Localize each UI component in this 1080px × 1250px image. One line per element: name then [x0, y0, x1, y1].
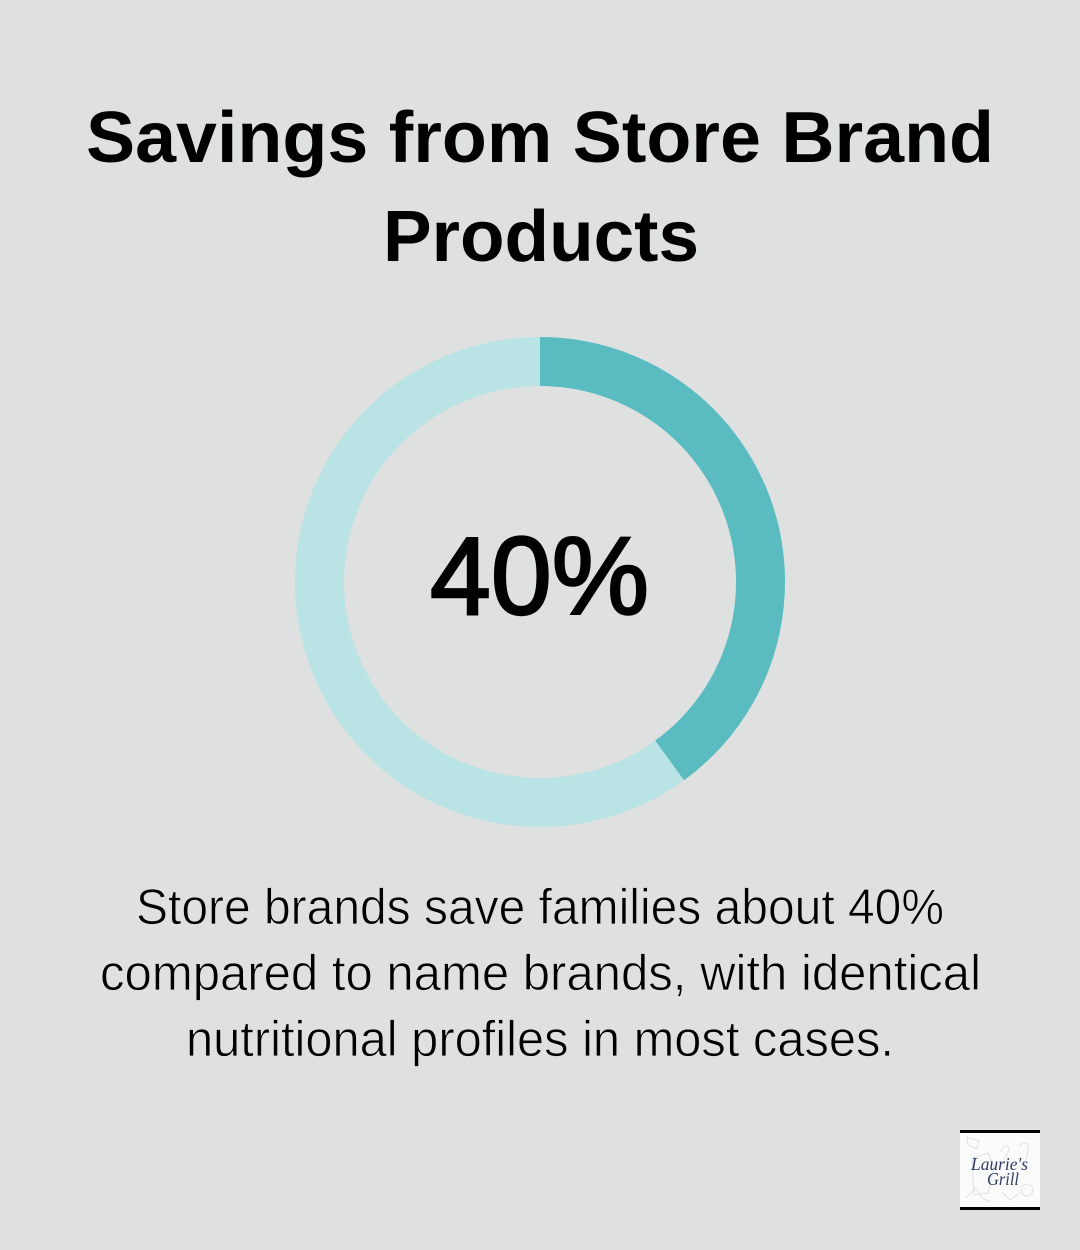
logo top bar — [960, 1130, 1040, 1133]
logo text: Grill — [987, 1169, 1019, 1189]
logo sketch decoration — [966, 1137, 1033, 1202]
logo text — [970, 1154, 1028, 1189]
logo bottom bar — [960, 1207, 1040, 1210]
description text: nutritional profiles in most cases. — [186, 1011, 894, 1067]
title: Savings from Store Brand — [86, 98, 994, 178]
center value: 40% — [430, 515, 649, 638]
description text: compared to name brands, with identical — [100, 945, 981, 1001]
description text — [100, 879, 981, 1067]
logo: Laurie's Grill — [960, 1130, 1040, 1210]
title — [86, 98, 994, 277]
title: Products — [383, 197, 699, 277]
donut chart: 40% — [320, 362, 761, 802]
donut track — [320, 362, 760, 802]
description text: Store brands save families about 40% — [136, 879, 944, 935]
logo text: Laurie's — [970, 1154, 1028, 1174]
donut value arc — [540, 362, 761, 760]
logo background — [960, 1130, 1040, 1210]
